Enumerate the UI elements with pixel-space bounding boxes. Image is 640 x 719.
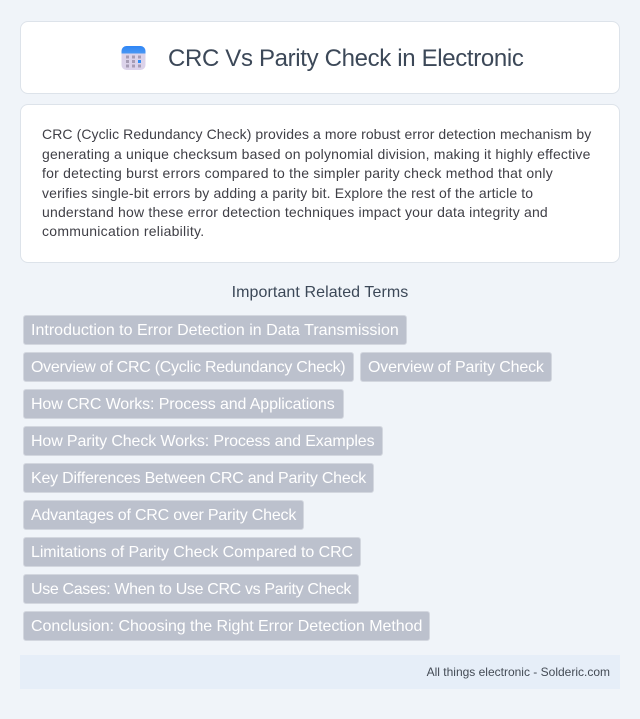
- tag: [23, 315, 407, 345]
- tag: [23, 500, 304, 530]
- title: CRC Vs Parity Check in Electronic: [168, 45, 524, 72]
- tag: Overview of CRC (Cyclic Redundancy Check): [31, 359, 345, 376]
- tag: Overview of Parity Check: [368, 359, 544, 376]
- section heading: Important Related Terms: [232, 284, 408, 301]
- tag: Introduction to Error Detection in Data Transmission: [31, 322, 399, 339]
- intro text card: [20, 104, 620, 263]
- footer bar: [20, 655, 620, 689]
- intro paragraph: communication reliability.: [42, 223, 204, 239]
- icon: calendar: [122, 46, 146, 70]
- tag: [23, 463, 374, 493]
- tag: Use Cases: When to Use CRC vs Parity Check: [31, 581, 351, 598]
- tag: [23, 389, 344, 419]
- intro paragraph: understand how these error detection techniques impact your data integrity and: [42, 204, 548, 220]
- intro paragraph: [42, 126, 592, 239]
- tag: [23, 611, 430, 641]
- intro paragraph: generating a unique checksum based on polynomial division, making it highly effective: [42, 146, 591, 162]
- tag: Limitations of Parity Check Compared to CRC: [31, 544, 353, 561]
- tag: [23, 574, 359, 604]
- tag: Advantages of CRC over Parity Check: [31, 507, 296, 524]
- intro paragraph: CRC (Cyclic Redundancy Check) provides a more robust error detection mechanism by: [42, 126, 591, 142]
- tag: How CRC Works: Process and Applications: [31, 396, 335, 413]
- tag: [23, 537, 361, 567]
- tag: Key Differences Between CRC and Parity Check: [31, 470, 366, 487]
- footer text: All things electronic - Solderic.com: [427, 665, 610, 679]
- related terms tags: [23, 315, 552, 641]
- header card: [20, 21, 620, 94]
- tag: [23, 426, 383, 456]
- tag: Conclusion: Choosing the Right Error Detection Method: [31, 618, 422, 635]
- tag: How Parity Check Works: Process and Examples: [31, 433, 374, 450]
- intro paragraph: for detecting burst errors compared to the simpler parity check method that only: [42, 165, 553, 181]
- tag: [360, 352, 552, 382]
- tag: [23, 352, 354, 382]
- intro paragraph: verifies single-bit errors by adding a parity bit. Explore the rest of the article to: [42, 185, 533, 201]
